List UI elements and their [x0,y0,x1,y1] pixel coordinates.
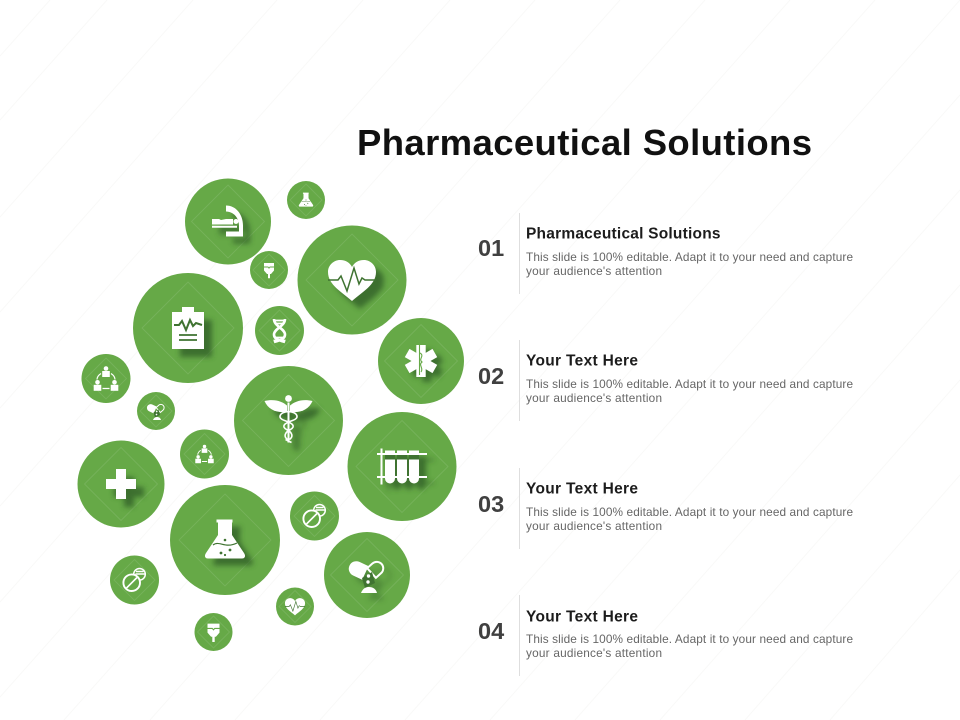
circle: team network [82,354,130,403]
circle: pills lower left [110,556,159,604]
item 02: 02 [478,363,504,389]
item 03: 03 [478,491,504,517]
title: Pharmaceutical Solutions [357,122,812,163]
circle: test tubes [348,412,456,521]
circle: flask [170,485,280,595]
circle: small heart [276,588,314,626]
circle: DNA [255,306,304,355]
item 02: Your Text Here [526,352,638,370]
circle: imaging scanner [185,178,271,264]
item 04: Your Text Here [526,608,638,626]
item 01 [478,213,853,294]
circle: IV bag [250,251,288,289]
item 02 [478,340,853,421]
item 03 [478,468,853,549]
item 02: your audience's attention [526,391,662,405]
circle: capsule [324,532,410,618]
item 04: This slide is 100% editable. Adapt it to your need and capture [526,632,853,646]
circle: small team network [180,430,229,478]
item 04 [478,595,853,676]
item 01: Pharmaceutical Solutions [526,226,720,242]
circle: pills [290,492,339,540]
item 04: your audience's attention [526,646,662,660]
circle: heart rate [298,226,406,334]
circle: small capsule [137,392,175,430]
circle: small flask [287,181,325,219]
circle: caduceus [234,366,343,475]
circle: plus [78,440,164,528]
item 03: your audience's attention [526,519,662,533]
circle: star of life [378,318,464,404]
circle: clipboard [133,273,243,383]
item 01: 01 [478,235,504,261]
item 03: Your Text Here [526,480,638,498]
item 04: 04 [478,618,504,644]
item 01: This slide is 100% editable. Adapt it to your need and capture [526,250,853,264]
item 03: This slide is 100% editable. Adapt it to your need and capture [526,505,853,519]
item 02: This slide is 100% editable. Adapt it to your need and capture [526,377,853,391]
item 01: your audience's attention [526,264,662,278]
circle: IV bag bottom [194,613,232,651]
